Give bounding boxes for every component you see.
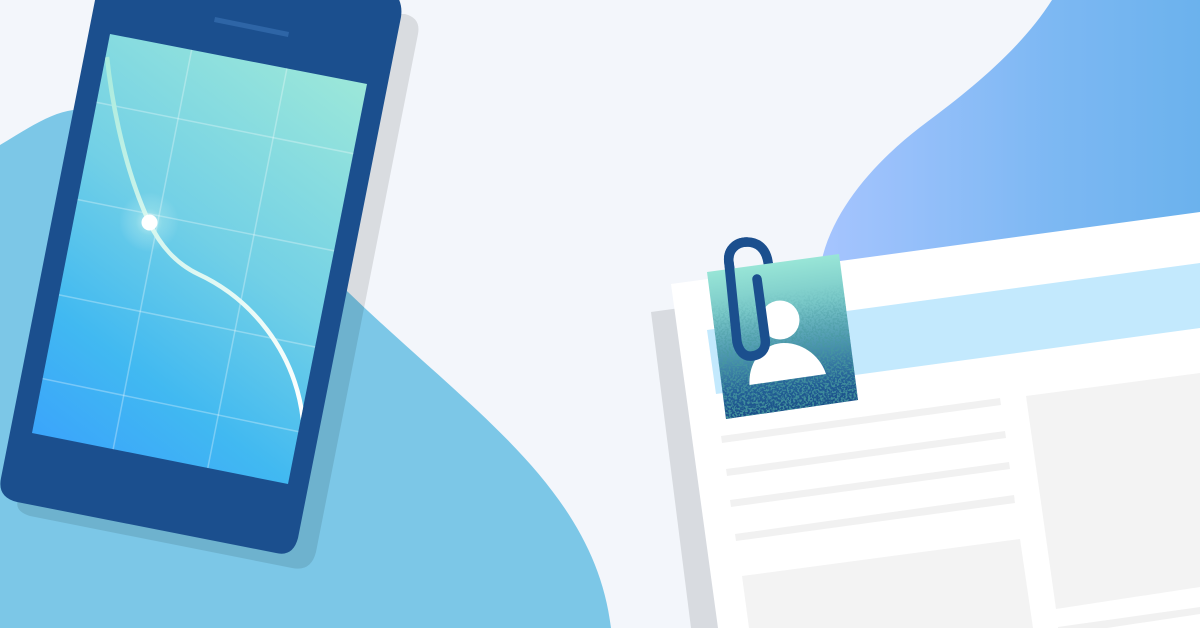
document: [651, 212, 1200, 628]
data point: [142, 214, 158, 230]
phone body: [0, 0, 401, 554]
document header band: [707, 263, 1200, 394]
paperclip front: [729, 242, 765, 356]
profile card: [707, 254, 858, 419]
card gradient: [707, 254, 858, 419]
text lines: [721, 398, 1200, 628]
data point glow: [124, 196, 174, 248]
document page: [671, 212, 1200, 628]
right image placeholder: [1026, 373, 1200, 609]
document shadow: [651, 308, 725, 628]
person head: [760, 300, 800, 340]
phone speaker: [214, 17, 289, 37]
lower image placeholder: [742, 539, 1033, 628]
phone: [0, 0, 401, 554]
blob: top right gradient: [820, 0, 1200, 270]
phone shadow: [17, 10, 418, 569]
chart curve: [107, 57, 303, 420]
paperclip back: [729, 242, 770, 290]
card grain: [712, 297, 858, 419]
blob: left light blue: [0, 110, 611, 628]
person body: [749, 343, 826, 385]
chart on screen: [30, 48, 360, 472]
chart grid: [30, 48, 360, 472]
phone screen: [32, 34, 367, 484]
